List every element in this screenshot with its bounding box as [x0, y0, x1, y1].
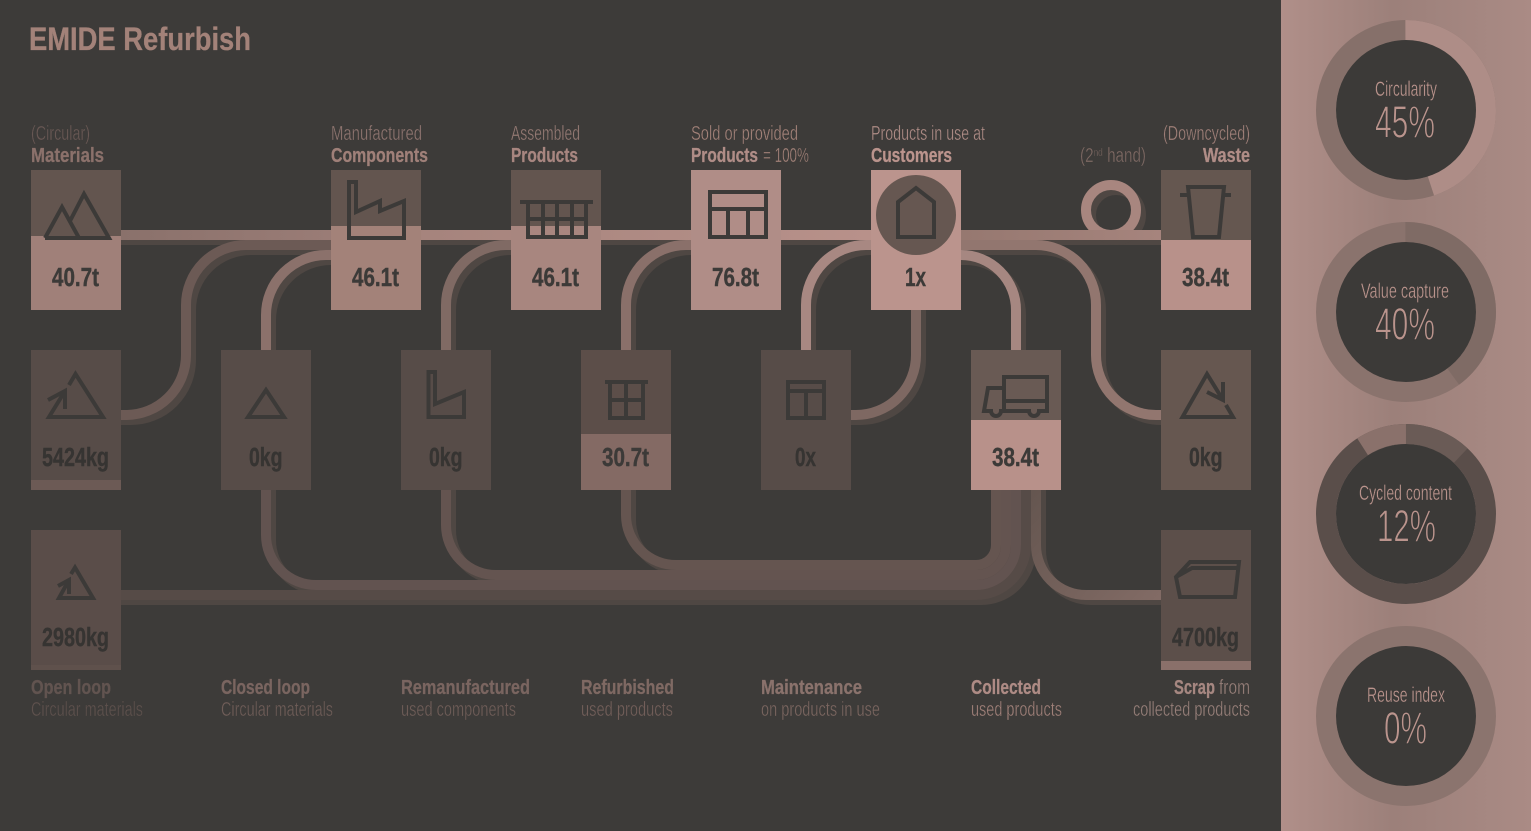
node: sold products: = 100% [763, 145, 809, 167]
label: closed loop: Closed loop [221, 676, 310, 699]
gauge: value capture [1326, 232, 1486, 392]
node: waste recycled: 0kg [1189, 444, 1222, 472]
icon: triangle with inward arrow [48, 374, 103, 417]
node: closed loop [221, 350, 311, 490]
node: remanufactured [401, 350, 491, 490]
node: circular materials: (Circular) [31, 123, 90, 145]
node: waste recycled [1161, 350, 1251, 490]
node: scrap [1161, 530, 1251, 670]
node: closed loop: 0kg [249, 444, 282, 472]
gauge: cycled content [1296, 404, 1516, 624]
node: maintenance: 0x [795, 444, 816, 472]
label: scrap: collected products [1133, 699, 1250, 721]
node: customers: 1x [905, 264, 926, 292]
title: EMIDE Refurbish [29, 21, 251, 57]
icon: window grid [605, 382, 648, 418]
node: customers: Customers [871, 144, 952, 167]
label: open loop: Circular materials [31, 699, 143, 721]
node: manufactured components: 46.1t [352, 264, 399, 292]
icon: small triangle with arrow [58, 568, 93, 598]
node: collected [971, 350, 1061, 490]
pipe: closed loop return [266, 490, 1016, 585]
icon: product layout [710, 192, 766, 237]
node: recycled materials stock [31, 350, 121, 490]
node: manufactured components [331, 123, 428, 310]
node: waste [1161, 123, 1251, 310]
node: sold products: 76.8t [712, 264, 759, 292]
pipe: refurbished return [626, 490, 996, 565]
pipe: production line [331, 230, 871, 240]
label: refurbished: used products [581, 699, 673, 721]
label: scrap [1133, 676, 1250, 721]
label: closed loop [221, 676, 333, 721]
label: collected: Collected [971, 676, 1041, 699]
pipe: customers to waste recycling [961, 245, 1161, 415]
gauge: value capture: 40% [1375, 298, 1435, 350]
icon: skip container [1176, 562, 1239, 597]
node: manufactured components: Manufactured [331, 123, 422, 145]
node: open loop [31, 530, 121, 670]
node: scrap: 4700kg [1172, 624, 1239, 652]
node: circular materials [31, 123, 121, 310]
node: waste: 38.4t [1182, 264, 1229, 292]
label: collected: used products [971, 699, 1062, 721]
node: sold products [691, 123, 809, 310]
sidebar panel [1281, 0, 1531, 831]
label: refurbished [581, 676, 674, 721]
pipe: materials recycling [121, 245, 331, 415]
label: second hand: nd [1094, 147, 1103, 159]
pipe: open loop return [121, 490, 1026, 595]
gauge: circularity: 45% [1375, 96, 1435, 148]
gauge: value capture: Value capture [1361, 280, 1449, 303]
label: open loop [31, 676, 143, 721]
icon: product grid [520, 202, 593, 237]
node: manufactured components: Components [331, 144, 428, 167]
icon: bin [1180, 187, 1231, 237]
pipe: second hand loop [1086, 185, 1136, 235]
node: circular materials: Materials [31, 144, 104, 167]
node: open loop: 2980kg [42, 624, 109, 652]
node: sold products: Sold or provided [691, 123, 798, 145]
pipe: customers to maintenance [851, 310, 916, 415]
label: collected [971, 676, 1062, 721]
label: remanufactured: Remanufactured [401, 676, 530, 699]
node: recycled materials stock: 5424kg [42, 444, 109, 472]
gauge: reuse index: Reuse index [1367, 684, 1445, 707]
label: second hand: hand) [1103, 145, 1146, 167]
label: second hand: (2 [1080, 145, 1098, 167]
icon: product frame [788, 382, 824, 418]
node: assembled products: 46.1t [532, 264, 579, 292]
icon: triangle [248, 390, 284, 417]
node: circular materials: 40.7t [52, 264, 99, 292]
pipe: customers to collected [961, 255, 1016, 350]
node: customers [871, 123, 985, 310]
gauge: cycled content: Cycled content [1359, 482, 1452, 505]
node: maintenance [761, 350, 851, 490]
gauge: circularity [1326, 30, 1486, 190]
label: remanufactured [401, 676, 530, 721]
pipe: closed loop to components [266, 255, 331, 350]
node: waste: (Downcycled) [1163, 123, 1250, 145]
gauge: reuse index: 0% [1384, 702, 1427, 754]
node: assembled products: Assembled [511, 123, 580, 145]
gauge: cycled content: 12% [1377, 500, 1436, 552]
pipe: customers to waste line [961, 230, 1161, 240]
node: assembled products: Products [511, 144, 578, 167]
pipe: refurbished to sold products [626, 245, 691, 350]
flow pipes [121, 185, 1166, 600]
node: refurbished: 30.7t [602, 444, 649, 472]
icon: truck [984, 377, 1047, 416]
label: remanufactured: used components [401, 699, 516, 721]
pipe: collected to scrap [1036, 490, 1161, 595]
label: maintenance [761, 676, 880, 721]
icon: triangle with outward arrow [1182, 374, 1233, 417]
node: refurbished [581, 350, 671, 490]
icon: small factory [428, 372, 464, 417]
pipe: virgin materials line [121, 230, 331, 240]
label: open loop: Open loop [31, 676, 111, 699]
pipe: maintenance to customers [806, 245, 871, 350]
label: closed loop: Circular materials [221, 699, 333, 721]
label: maintenance: Maintenance [761, 676, 862, 699]
gauge: circularity: Circularity [1375, 78, 1437, 101]
gauge: reuse index [1326, 636, 1486, 796]
icon: house [898, 188, 934, 237]
node: customers: Products in use at [871, 123, 985, 145]
label: scrap: from [1219, 677, 1250, 699]
node: sold products: Products [691, 144, 758, 167]
label: scrap: Scrap [1174, 676, 1215, 699]
node: assembled products [511, 123, 601, 310]
icon: mountains [45, 194, 109, 238]
label: maintenance: on products in use [761, 699, 880, 721]
node: remanufactured: 0kg [429, 444, 462, 472]
pipe: remanufactured to products [446, 245, 511, 350]
label: refurbished: Refurbished [581, 676, 674, 699]
node: waste: Waste [1203, 144, 1250, 167]
node: collected: 38.4t [992, 444, 1039, 472]
icon: factory [349, 182, 404, 238]
pipe: remanufactured return [446, 490, 1006, 575]
